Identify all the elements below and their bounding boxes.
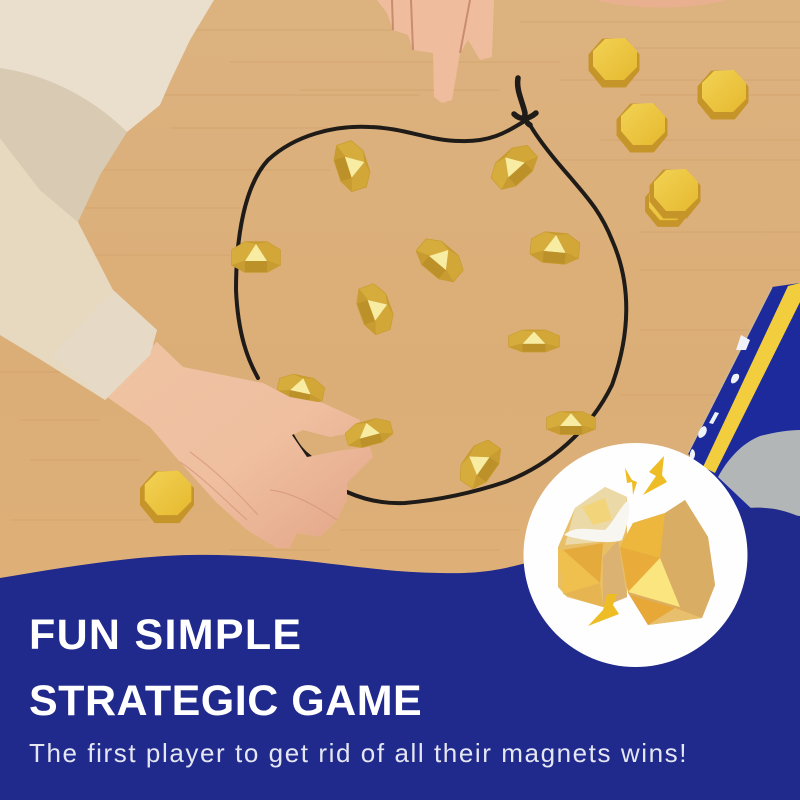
black rope loop (236, 78, 626, 503)
subtitle: The first player to get rid of all their magnets wins! (29, 738, 688, 768)
left magnet in inset (558, 487, 627, 607)
right magnet in inset (620, 500, 715, 625)
wood grain (0, 22, 800, 550)
magnets inside the rope (232, 139, 595, 492)
white burst between magnets (564, 500, 629, 542)
sleeve: upper arm, band, forearm and cuff (0, 0, 214, 400)
heading line two: STRATEGIC GAME (29, 677, 422, 725)
white circle inset with two magnets (524, 443, 748, 667)
blue wave banner (0, 508, 800, 800)
lower hand holding a magnet (100, 342, 394, 548)
lightning bolts (588, 456, 667, 626)
heading line one: FUN SIMPLE (29, 611, 302, 659)
game box (688, 283, 800, 520)
top hand pointing (377, 0, 726, 103)
golden coin magnets outside the rope (142, 38, 747, 522)
